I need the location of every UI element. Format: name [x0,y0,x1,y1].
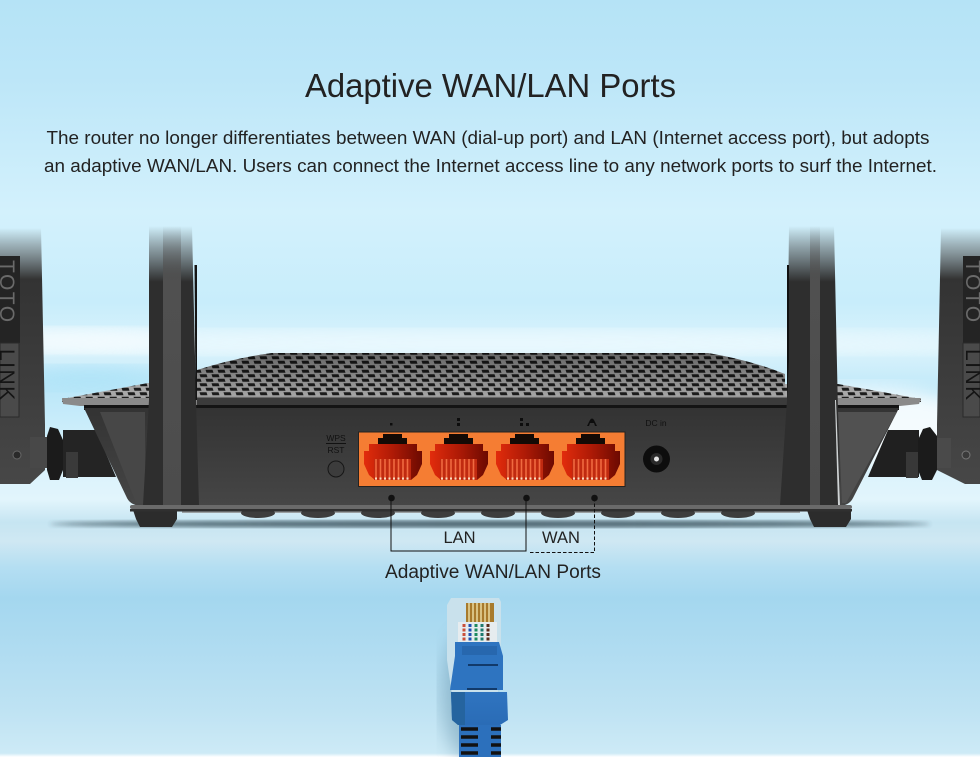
right outer antenna [937,228,980,484]
router [0,226,980,527]
top plate edge [62,396,921,406]
port bracket: LAN: LAN [443,529,476,547]
DC in jack: DC in [645,418,667,428]
left outer antenna [0,228,45,484]
inner right antenna [780,226,840,505]
inner left antenna [143,226,199,505]
router top mesh [62,353,921,402]
description text: The router no longer differentiates between WAN (dial-up port) and LAN (Internet access port), but adopts [46,127,929,148]
left antenna hinge [30,427,116,480]
underside bumps [182,508,800,518]
orange port panel [358,432,625,486]
feet [133,510,851,527]
port bracket: WAN: WAN [542,529,580,547]
router body [84,408,899,506]
cable strain relief [459,725,501,757]
port bracket: LAN [388,495,530,551]
port bracket: WAN [529,495,598,552]
right antenna hinge [868,427,951,480]
WPS/RST button: WPS [326,433,346,443]
description text: an adaptive WAN/LAN. Users can connect the Internet access line to any network ports to surf the Internet. [44,155,937,176]
WPS/RST button: RST [328,445,344,455]
bottom lip [130,505,852,512]
dark seam [84,405,899,410]
description text [44,127,937,176]
WPS/RST button [326,433,346,477]
port indicator icons [390,418,597,426]
blue boot [450,642,508,725]
clear plug [447,598,501,695]
DC in jack [643,418,670,472]
caption: Adaptive WAN/LAN Ports [385,562,601,583]
title: Adaptive WAN/LAN Ports [305,67,676,104]
ethernet cable [442,598,508,757]
body side facets [100,412,897,503]
